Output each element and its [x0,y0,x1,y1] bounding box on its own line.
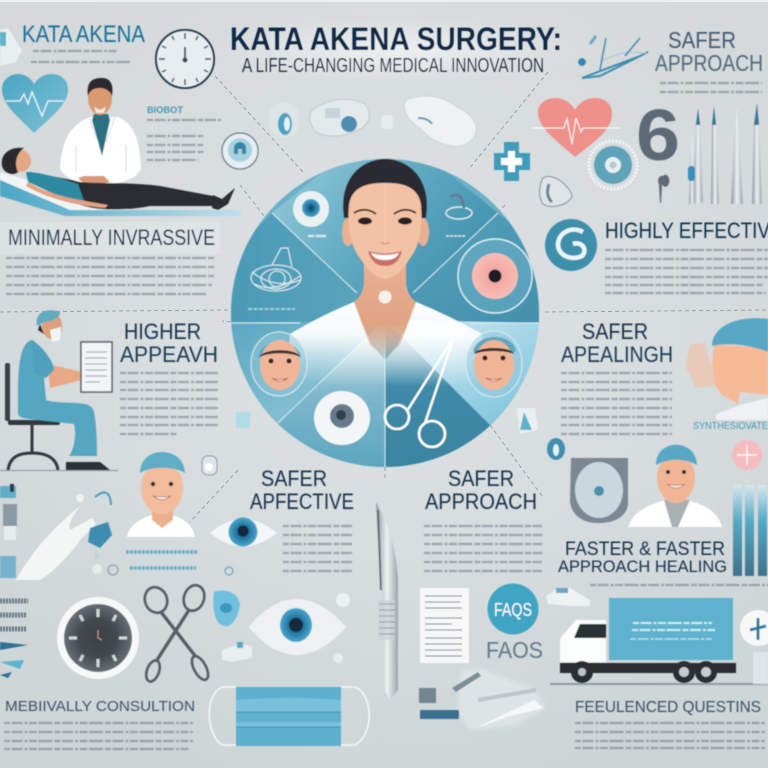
icon: medical cross [494,142,530,181]
panel: minimally invasive [0,222,220,294]
icon: surgical instruments [658,103,762,204]
floor line [0,470,118,471]
icon: small silver ring [540,177,572,206]
title: KATA AKENA SURGERY: [230,21,562,57]
panel: highly effective [605,218,768,293]
faq badge: FAQS [494,600,532,620]
icon: lab equipment left column [0,484,17,578]
panel: safer approach lower [424,466,542,571]
doctor [60,78,141,184]
panel: faster healing: APPROACH HEALING [558,557,727,576]
small drop icons [202,408,565,475]
illustration: profile heads right [685,318,768,432]
wedge: top [272,159,498,296]
icon: wall clock [156,30,214,88]
clipboard [81,342,112,392]
patient [2,148,235,210]
title: A LIFE-CHANGING MEDICAL INNOVATION [242,55,544,77]
numeral six: 6 [636,96,680,176]
bed [0,172,242,216]
panel: frequently asked questions: FEEULENCED QUESTINS [575,699,761,716]
icon: right face in bubble [466,331,522,397]
panel: safer appealing: APEALINGH [561,342,673,367]
icon: document [420,588,469,663]
icon: surgical tool top right [579,36,648,78]
faq badge [486,584,543,663]
icon: pink iris [458,239,532,313]
panel: safer approach heading: SAFER [668,27,736,53]
surgeon body [18,310,110,470]
panel: central circle [225,150,545,470]
icon: dark dial clock [57,597,139,679]
icon: forceps [385,340,453,447]
icon: grey disc device [570,458,628,523]
icon: vials [733,485,767,576]
panel: safer approach lower: APPROACH [425,489,537,514]
icon: lens sketch top right [446,195,472,236]
wedge: bottom left [286,328,385,468]
panel: safer affective [250,466,354,571]
faq badge: FAOS [486,637,543,663]
icon: teal G badge [545,219,597,271]
icon: blue heart with pulse [2,74,68,133]
wedge: bottom right [385,320,490,470]
panel: minimally invasive: MINIMALLY INVRASSIVE [8,225,215,250]
surgeon seated illustration [0,310,118,471]
text block: mini article [147,105,222,160]
icon: pink plus [732,440,762,470]
panel: safer approach heading [655,27,763,92]
icon: coral heart [531,98,620,157]
woman portrait [286,159,488,385]
panel: frequently asked questions [575,699,765,748]
panel: safer appealing: SAFER [582,319,648,344]
panel: safer approach lower: SAFER [448,466,514,491]
panel: safer appealing [561,319,673,434]
icon: large eye [248,593,350,663]
wedge: lower left [231,324,346,422]
icon: glass devices [268,96,476,146]
portrait: male surgeon [628,445,722,527]
icon: gear ring [589,141,637,189]
portrait: female surgeon [126,452,198,568]
wedge: upper right [410,214,540,322]
icon: glass instruments bottom [419,668,546,730]
wedge: upper left [230,214,360,322]
panel: faster healing: FASTER & FASTER [565,539,725,560]
icon: round badge [222,133,258,169]
panel: kata akena heading [0,21,145,66]
icon: white lens disc [314,391,370,445]
panel: medically consultation [4,698,195,749]
panel: faster healing [558,539,768,585]
panel: higher appeal [120,319,218,434]
icon: surgical scissors [141,583,211,683]
text block: mini article: BIOBOT [147,105,184,115]
icon: left face in bubble [251,332,307,396]
title [206,16,586,84]
chair [5,363,60,470]
doctor and patient illustration [0,78,242,216]
icon: blue gel blob [213,590,252,662]
wedge: lower right [394,320,539,425]
icon: blue eye [210,518,277,546]
panel: higher appeal: HIGHER [124,319,201,344]
icon: eye in circle [293,191,329,236]
icon: gloved hand with tool [16,492,233,580]
icon: delivery truck [546,588,768,685]
icon: white badge at right edge [740,610,768,684]
icon: lens wireframe [248,248,301,309]
panel: kata akena heading: KATA AKENA [22,21,145,48]
panel: medically consultation: MEBIIVALLY CONSULTION [5,698,195,715]
panel: higher appeal: APPEAVH [120,342,218,367]
panel: safer affective: SAFER [261,466,327,491]
dashed connector lines [0,72,768,522]
panel: safer affective: APFECTIVE [250,489,354,514]
small text scraps left [0,601,28,678]
icon: surgical mask [209,687,369,746]
icon: vertical scalpel [376,502,398,700]
